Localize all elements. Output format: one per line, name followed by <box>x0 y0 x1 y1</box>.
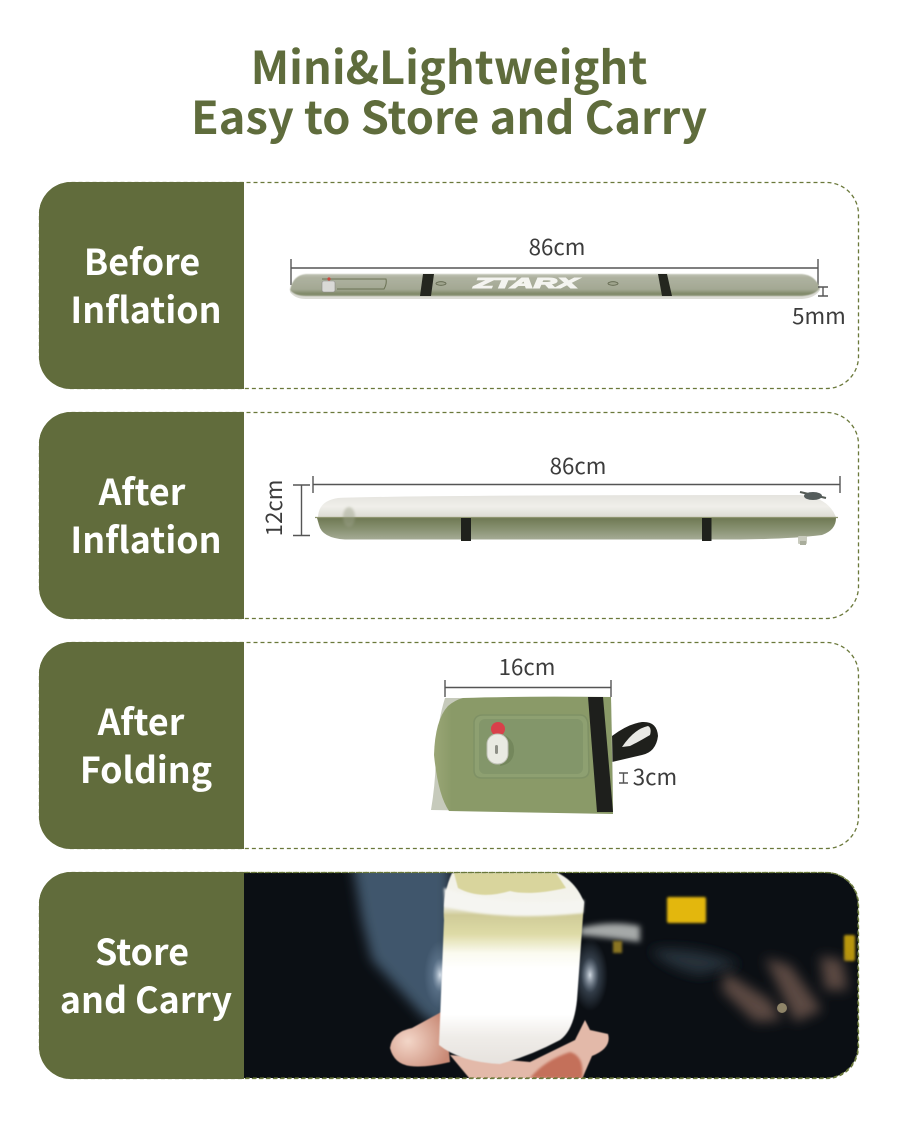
photo: glowing lantern in hand <box>244 860 860 1079</box>
carry loop <box>612 722 658 762</box>
dimension: 3cm thickness: 3cm <box>633 760 677 792</box>
strap left <box>461 518 471 541</box>
photo dashed edge <box>244 872 858 1078</box>
dimension: 86cm width <box>313 449 840 493</box>
holding hand <box>390 1010 609 1079</box>
label panel: after inflation: After <box>98 464 186 516</box>
label panel: before inflation: Inflation <box>70 282 222 334</box>
strap <box>588 697 613 812</box>
panel: after inflation <box>39 412 858 619</box>
strap right <box>702 518 712 541</box>
label panel: store and carry <box>39 872 244 1079</box>
label panel: after folding <box>39 642 244 849</box>
inflated mat <box>315 492 838 545</box>
sleeve <box>352 860 450 1030</box>
dimension: 16cm width: 16cm <box>499 650 555 682</box>
title: Mini&Lightweight <box>251 33 647 98</box>
valve <box>487 734 514 766</box>
dimension: 86cm width: 86cm <box>550 449 606 481</box>
label panel: after inflation <box>39 412 244 619</box>
panel: before inflation <box>39 182 858 389</box>
label panel: after folding: After <box>97 694 185 746</box>
dimension: 16cm width <box>445 650 611 697</box>
title <box>191 33 707 148</box>
strap right <box>658 274 672 296</box>
panel: store and carry <box>39 860 860 1079</box>
label panel: store and carry: and Carry <box>60 972 233 1024</box>
bottom valve <box>798 536 807 545</box>
deflated mat <box>290 274 820 299</box>
dimension: 86cm width: 86cm <box>529 230 585 262</box>
label panel: before inflation <box>39 182 244 389</box>
blurred background hand <box>722 956 848 1022</box>
label panel: before inflation: Before <box>84 234 200 286</box>
label panel: after folding: Folding <box>80 742 212 794</box>
logo: ZTARX <box>472 275 580 292</box>
yellow tag <box>667 897 706 923</box>
lantern <box>439 873 584 1064</box>
dimension: 5mm thickness: 5mm <box>792 299 846 331</box>
label panel: store and carry: Store <box>95 924 189 976</box>
panel: after folding <box>39 642 858 849</box>
label panel: after inflation: Inflation <box>70 512 222 564</box>
dimension: 12cm height <box>257 480 310 536</box>
folded pouch <box>431 697 658 814</box>
dimension: 86cm width <box>291 230 818 285</box>
title: Easy to Store and Carry <box>191 83 707 148</box>
dimension: 12cm height: 12cm <box>257 480 289 536</box>
power icon <box>491 722 505 736</box>
top valve <box>800 492 826 500</box>
white smear <box>580 923 640 942</box>
valve <box>322 277 335 292</box>
strap left <box>420 274 434 296</box>
